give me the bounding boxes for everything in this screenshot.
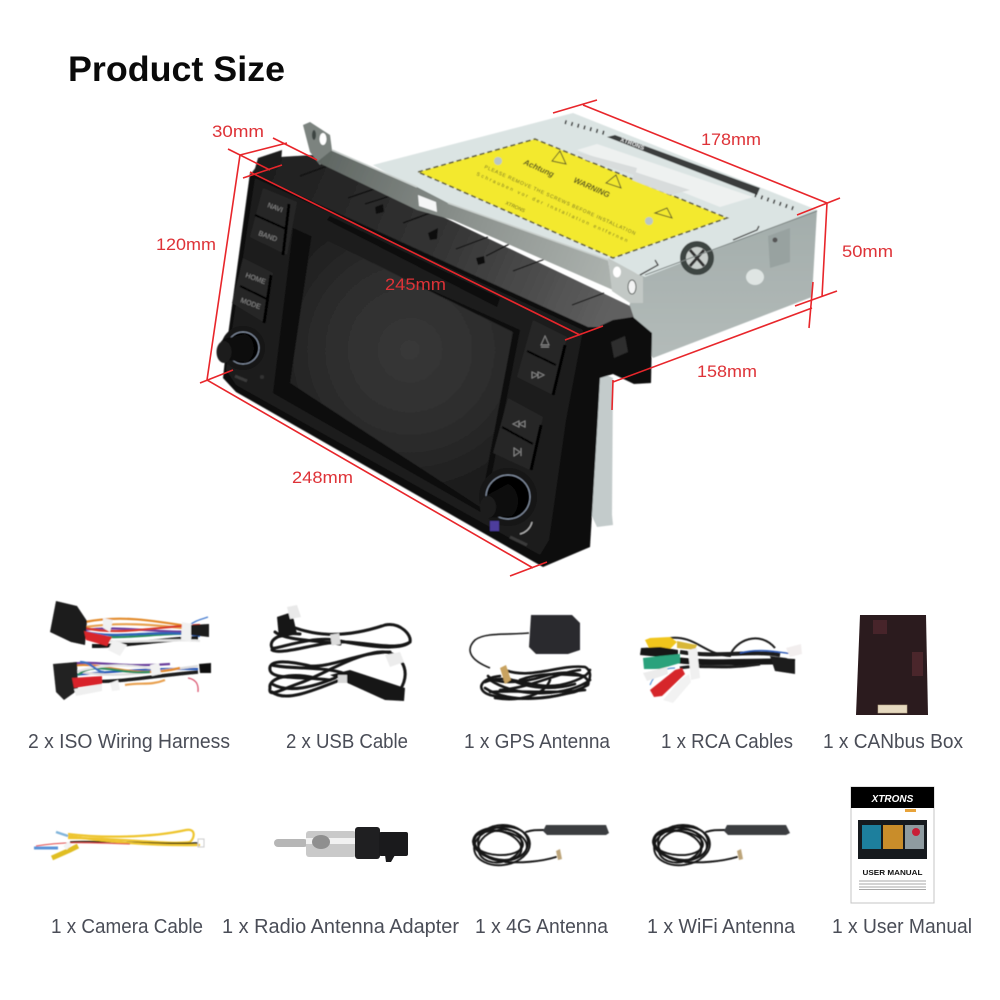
warning label: Schrauben vor der Installation entfernen bbox=[475, 171, 629, 244]
dimension label: 248mm: 248mm bbox=[292, 468, 353, 487]
disc slot bbox=[327, 216, 500, 307]
label: GPS antenna: 1 x GPS Antenna bbox=[464, 731, 611, 753]
dimension: 178mm bbox=[553, 100, 840, 215]
top surface slots bbox=[300, 165, 604, 305]
unit top surface bbox=[250, 155, 634, 330]
accessory: CANbus box bbox=[856, 615, 928, 715]
accessory: 4G antenna bbox=[471, 823, 609, 869]
chassis side panel bbox=[625, 210, 817, 358]
dimension label: 30mm: 30mm bbox=[212, 122, 264, 141]
side clip left bbox=[254, 150, 282, 175]
warning label bbox=[418, 139, 727, 258]
accessory: ISO wiring harness bbox=[50, 601, 211, 700]
warning label: WARNING bbox=[572, 176, 611, 200]
dimension: 248mm bbox=[207, 380, 547, 576]
metal mounting bracket bbox=[303, 122, 643, 303]
front face outer body bbox=[223, 173, 603, 567]
buttons: NAVI bbox=[266, 202, 284, 214]
accessory: user manual: USER MANUAL bbox=[862, 868, 923, 877]
chassis top cover bbox=[373, 113, 817, 277]
head unit product photo bbox=[216, 113, 817, 567]
accessory: user manual bbox=[851, 787, 934, 903]
accessory: RCA cables bbox=[640, 637, 802, 703]
buttons: BAND bbox=[257, 230, 278, 244]
label: ISO wiring harness: 2 x ISO Wiring Harness bbox=[28, 731, 230, 753]
spec sticker bbox=[577, 144, 753, 207]
dimension label: 120mm: 120mm bbox=[156, 235, 216, 254]
accessory: WiFi antenna bbox=[651, 823, 790, 869]
chassis rear strip below the bracket bbox=[590, 370, 613, 527]
right tuning knob bbox=[479, 468, 537, 534]
status marks and card slots bbox=[235, 375, 527, 545]
buttons: MODE bbox=[239, 297, 262, 311]
right mounting block bbox=[600, 317, 652, 384]
side details: logo stamp and clips bbox=[640, 211, 817, 285]
dimension: 245mm bbox=[243, 165, 603, 340]
dimension: 50mm bbox=[795, 203, 837, 306]
label: user manual: 1 x User Manual bbox=[832, 916, 972, 938]
label: WiFi antenna: 1 x WiFi Antenna bbox=[647, 916, 796, 938]
accessory: GPS antenna bbox=[470, 615, 590, 699]
warning label: PLEASE REMOVE THE SCREWS BEFORE INSTALLATION bbox=[483, 164, 637, 237]
accessory: camera cable bbox=[34, 830, 204, 858]
label: 4G antenna: 1 x 4G Antenna bbox=[475, 916, 609, 938]
dimension: 120mm bbox=[200, 155, 240, 383]
label: RCA cables: 1 x RCA Cables bbox=[661, 731, 793, 753]
screen recess bbox=[273, 228, 520, 514]
title: Product Size bbox=[68, 50, 285, 89]
label: radio antenna adapter: 1 x Radio Antenna Adapter bbox=[222, 916, 459, 938]
front panel bezel bbox=[226, 178, 583, 555]
screen bbox=[290, 233, 513, 507]
buttons bbox=[232, 188, 567, 470]
accessory: radio antenna adapter bbox=[274, 827, 408, 862]
dimension label: 245mm: 245mm bbox=[385, 275, 446, 294]
dimension label: 178mm: 178mm bbox=[701, 130, 761, 149]
warning label: XTRONS bbox=[503, 200, 526, 215]
dimension label: 50mm: 50mm bbox=[842, 242, 893, 261]
accessory: user manual: XTRONS bbox=[871, 794, 914, 805]
label: USB cable: 2 x USB Cable bbox=[286, 731, 408, 753]
dimension: 158mm bbox=[612, 282, 813, 410]
dimension lines bbox=[200, 100, 840, 576]
vent slots bbox=[565, 122, 795, 209]
accessory: USB cables bbox=[270, 605, 410, 701]
dimension label: 158mm: 158mm bbox=[697, 362, 757, 381]
dimension: 30mm bbox=[228, 138, 317, 170]
warning label: Achtung bbox=[521, 157, 556, 179]
label: camera cable: 1 x Camera Cable bbox=[51, 916, 203, 938]
buttons: HOME bbox=[244, 272, 267, 286]
head unit product photo: XTRONS bbox=[619, 137, 645, 152]
label: CANbus box: 1 x CANbus Box bbox=[823, 731, 963, 753]
left volume knob bbox=[216, 326, 265, 370]
